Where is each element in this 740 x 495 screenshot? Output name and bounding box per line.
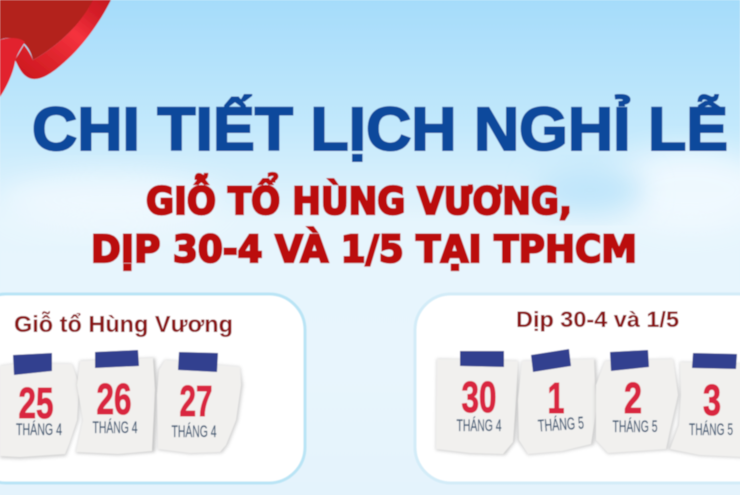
calendar: 26 tháng 4: THÁNG 4 — [92, 418, 138, 437]
calendar: 26 tháng 4 — [76, 350, 158, 455]
panel background — [0, 294, 305, 483]
calendar: 3 tháng 5 — [668, 353, 740, 458]
calendar: 2 tháng 5: THÁNG 5 — [612, 417, 658, 436]
panel: Giỗ tổ Hùng Vương — [0, 294, 305, 483]
calendar: 27 tháng 4: THÁNG 4 — [172, 422, 216, 441]
calendar: 27 tháng 4 — [156, 352, 243, 454]
calendar: 3 tháng 5: 3 — [703, 376, 721, 425]
subtitle line 2: DỊP 30-4 VÀ 1/5 TẠI TPHCM — [91, 227, 637, 271]
panel heading: Giỗ tổ Hùng Vương — [14, 310, 233, 337]
calendar: 2 tháng 5 — [595, 350, 680, 454]
calendar: 30 tháng 4: THÁNG 4 — [456, 416, 502, 435]
calendar: 25 tháng 4: THÁNG 4 — [16, 420, 62, 439]
subtitle line 1: GIỖ TỔ HÙNG VƯƠNG, — [146, 173, 572, 223]
calendar: 1 tháng 5 — [517, 349, 600, 455]
calendar: 27 tháng 4: 27 — [180, 377, 212, 426]
panel heading: Dịp 30-4 và 1/5 — [516, 307, 679, 332]
ribbon: red corner — [0, 0, 111, 97]
calendar: 25 tháng 4 — [0, 353, 81, 459]
subtitle — [91, 173, 637, 271]
calendar: 26 tháng 4: 26 — [96, 375, 132, 424]
panel background — [415, 294, 740, 483]
title: CHI TIẾT LỊCH NGHỈ LỄ — [32, 95, 728, 163]
calendar: 2 tháng 5: 2 — [624, 374, 642, 423]
calendar: 1 tháng 5: 1 — [548, 374, 564, 423]
calendar: 30 tháng 4 — [436, 351, 520, 455]
calendar: 1 tháng 5: THÁNG 5 — [537, 413, 585, 436]
panel: Dịp 30-4 và 1/5 — [415, 294, 740, 483]
calendar: 30 tháng 4: 30 — [462, 373, 496, 422]
calendar: 25 tháng 4: 25 — [18, 379, 54, 428]
